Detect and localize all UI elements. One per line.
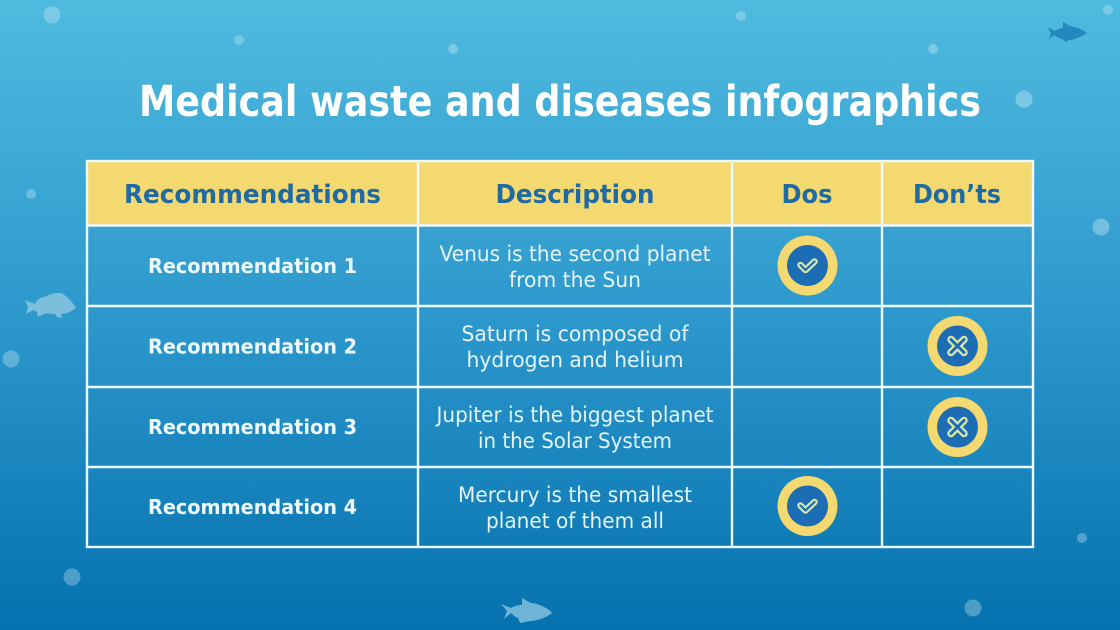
- description 4: [458, 483, 692, 534]
- row label 3: Recommendation 3: [148, 415, 357, 439]
- icon: cross row 3: [928, 397, 988, 457]
- description 1: Venus is the second planet: [440, 242, 710, 267]
- description 4: Mercury is the smallest: [458, 483, 692, 508]
- description 2: Saturn is composed of: [462, 322, 689, 347]
- description 3: in the Solar System: [478, 429, 672, 454]
- description 1: [440, 242, 710, 293]
- table grid: [87, 161, 1033, 547]
- icon: check row 4: [778, 476, 838, 536]
- description 4: planet of them all: [486, 509, 664, 534]
- description 2: [462, 322, 689, 373]
- row label 2: Recommendation 2: [148, 334, 357, 358]
- column heading: Don'ts: Don’ts: [913, 180, 1001, 210]
- description 3: [435, 403, 714, 454]
- column heading: Dos: Dos: [782, 180, 832, 210]
- row label 4: Recommendation 4: [148, 495, 357, 519]
- column heading: Recommendations: Recommendations: [124, 180, 381, 210]
- column heading: Description: Description: [496, 180, 654, 210]
- title: Medical waste and diseases infographics: [139, 77, 981, 127]
- icon: cross row 2: [928, 316, 988, 376]
- table: [87, 161, 1033, 547]
- table header band: [87, 161, 1033, 225]
- description 1: from the Sun: [509, 268, 641, 293]
- icon: fish top right: [1047, 22, 1087, 42]
- row label 1: Recommendation 1: [148, 254, 357, 278]
- description 2: hydrogen and helium: [466, 348, 684, 373]
- icon: check row 1: [778, 236, 838, 296]
- icon: fish bottom: [501, 598, 552, 623]
- icon: fish left: [25, 293, 76, 318]
- description 3: Jupiter is the biggest planet: [435, 403, 714, 428]
